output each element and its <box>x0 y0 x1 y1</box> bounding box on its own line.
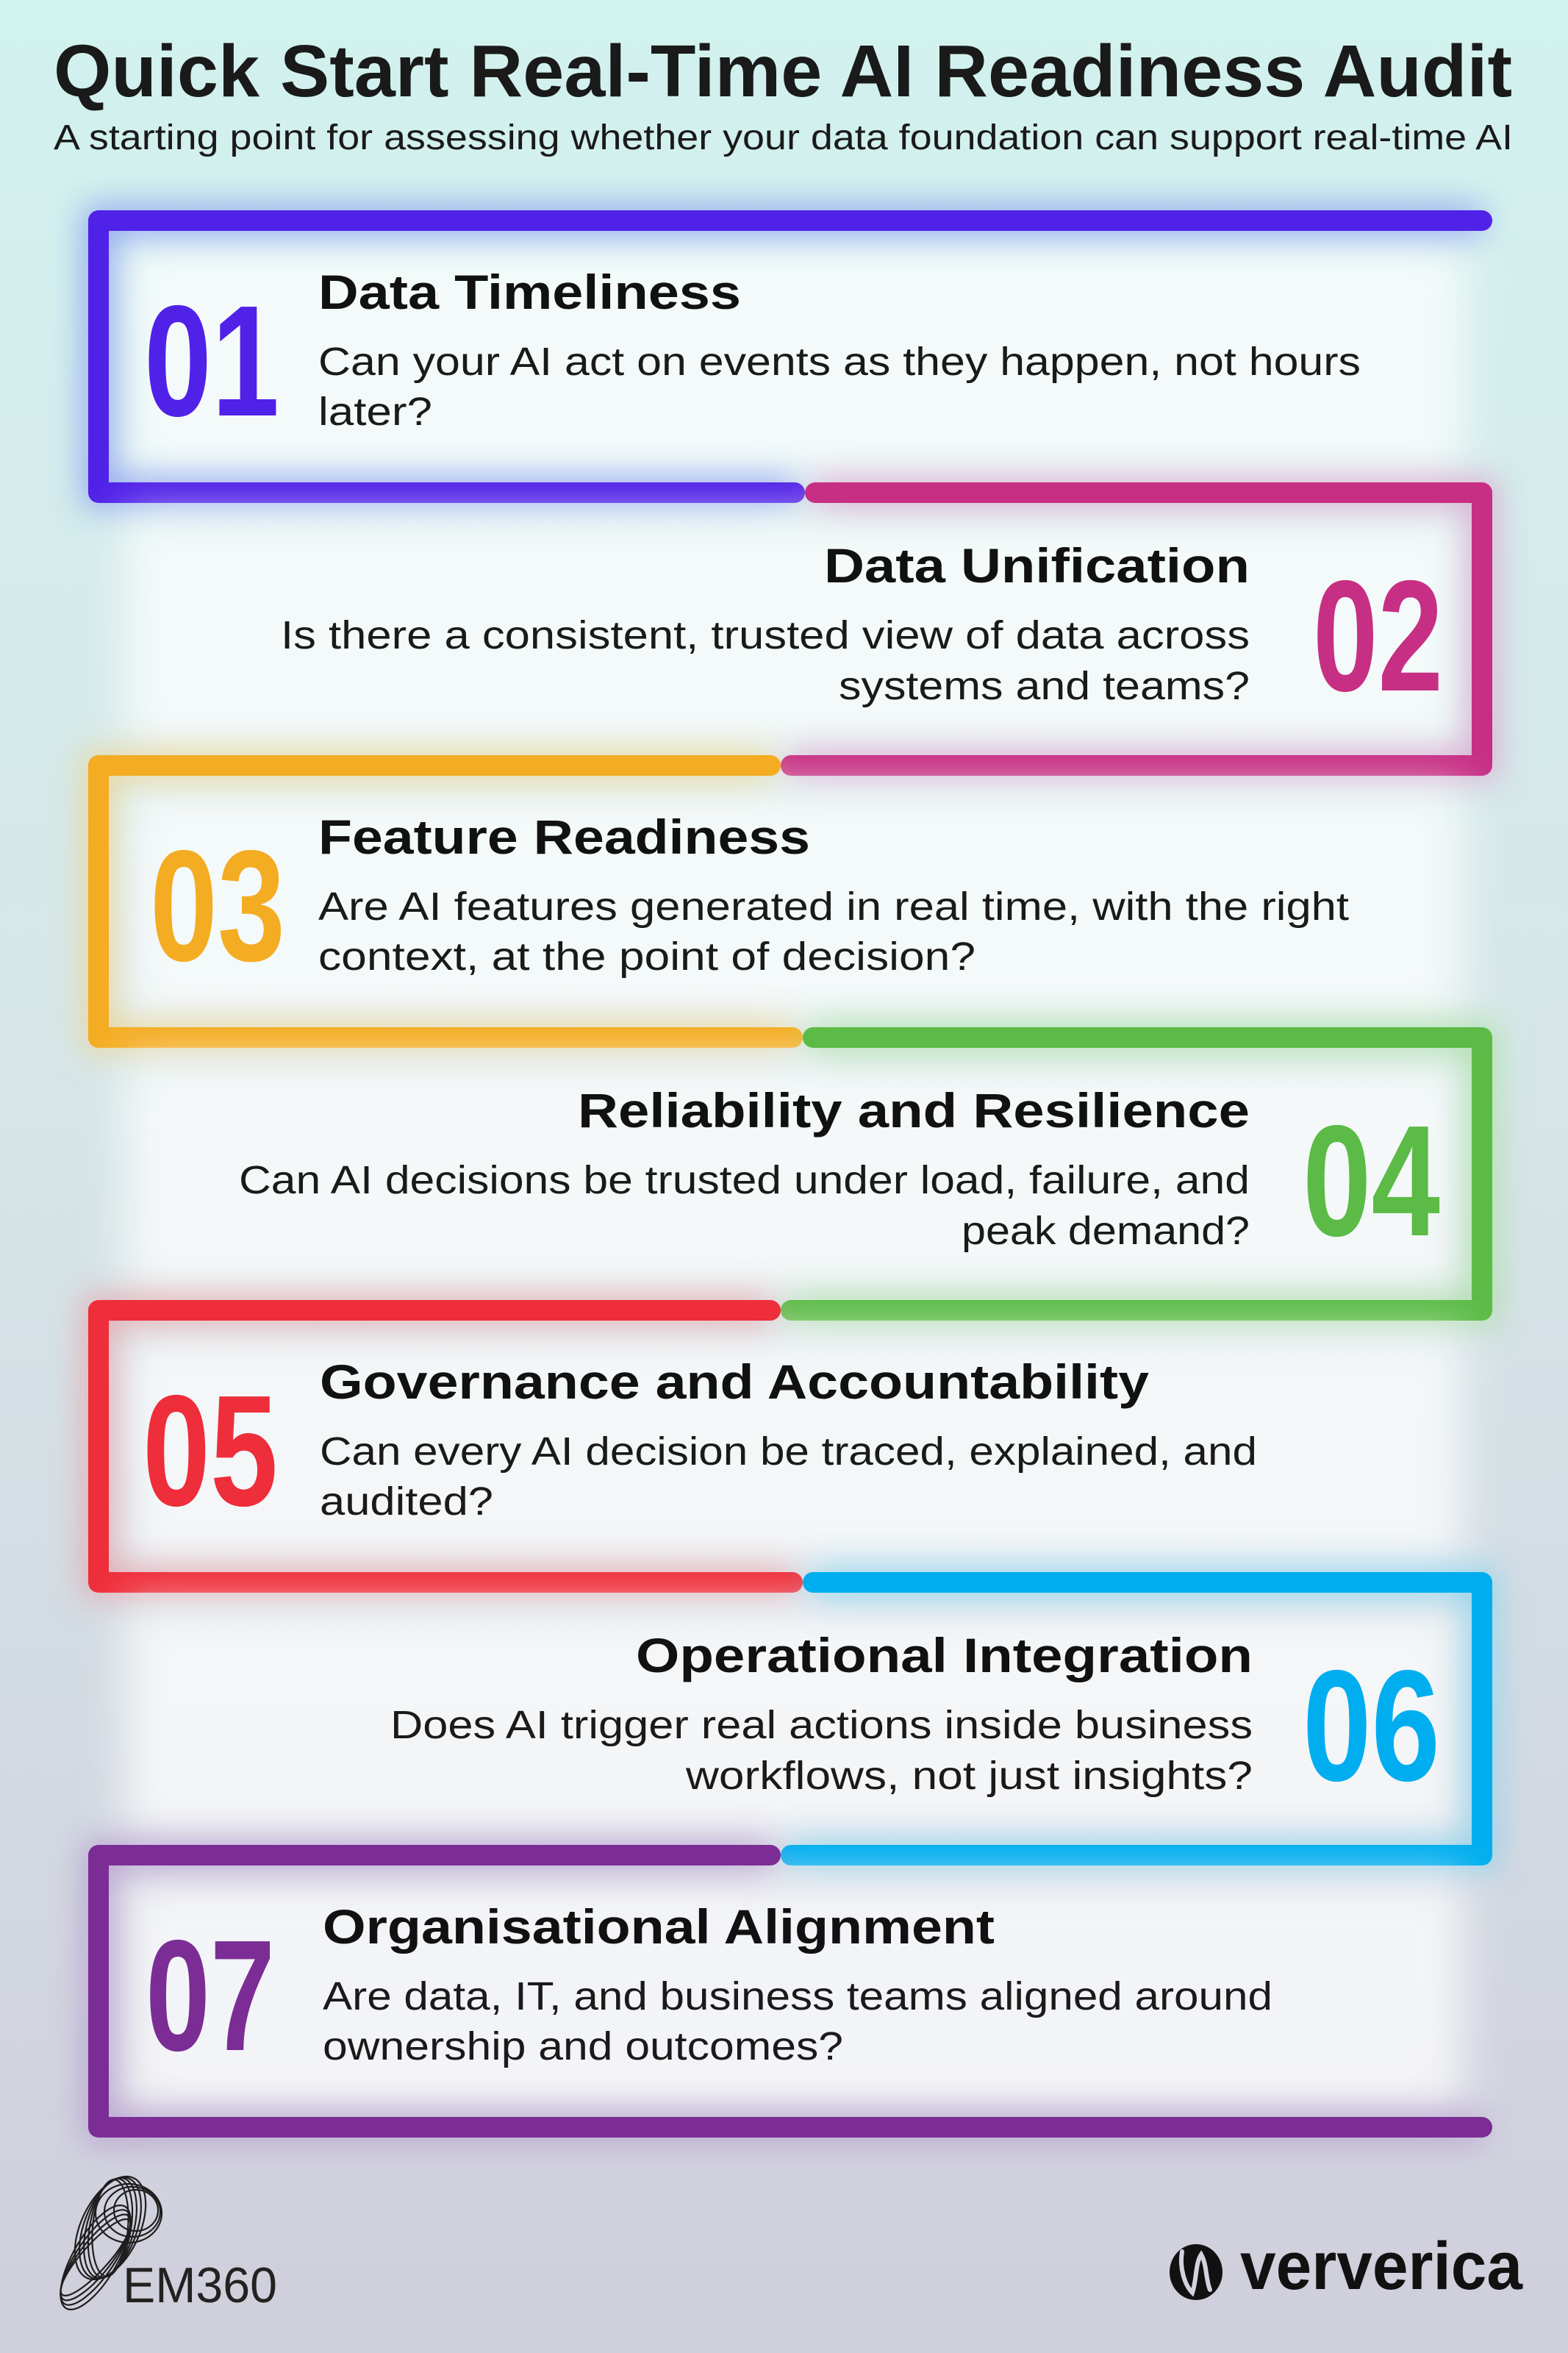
body text: Are AI features generated in real time, with the right <box>318 885 1349 929</box>
logo: EM360: EM360 <box>123 2257 277 2313</box>
panel: 07 Organisational Alignment <box>99 1855 1482 2127</box>
logo: ververica: ververica <box>1240 2229 1523 2304</box>
body text: Can your AI act on events as they happen, not hours <box>318 340 1361 384</box>
panel: 04 Reliability and Resilience <box>125 1038 1482 1310</box>
body text: Does AI trigger real actions inside business <box>390 1703 1253 1747</box>
body text: later? <box>318 390 432 434</box>
heading: Feature Readiness <box>318 810 810 864</box>
heading: Data Unification <box>824 538 1250 593</box>
number 07: 07 <box>146 1907 275 2084</box>
panel: 03 Feature Readiness <box>99 765 1463 1038</box>
panel: 05 Governance and Accountability <box>99 1310 1463 1582</box>
number 05: 05 <box>143 1362 278 1539</box>
heading: Organisational Alignment <box>323 1899 995 1954</box>
body text: Are data, IT, and business teams aligned around <box>323 1974 1272 2018</box>
number 06: 06 <box>1303 1637 1440 1814</box>
logo: EM360 <box>47 2165 277 2319</box>
body text: ownership and outcomes? <box>323 2024 843 2068</box>
body text: peak demand? <box>962 1209 1250 1253</box>
heading: Reliability and Resilience <box>578 1083 1250 1138</box>
body text: Can AI decisions be trusted under load, failure, and <box>239 1158 1250 1202</box>
panel: 06 Operational Integration <box>125 1582 1482 1855</box>
number 02: 02 <box>1313 547 1443 724</box>
subtitle: A starting point for assessing whether your data foundation can support real-time AI <box>54 118 1513 157</box>
number 03: 03 <box>150 817 285 994</box>
number 01: 01 <box>144 272 279 449</box>
number 04: 04 <box>1303 1092 1440 1269</box>
panel: 01 Data Timeliness <box>99 221 1482 493</box>
body text: Is there a consistent, trusted view of data across <box>281 613 1250 657</box>
title: Quick Start Real-Time AI Readiness Audit <box>54 30 1512 113</box>
body text: audited? <box>320 1479 493 1524</box>
heading: Operational Integration <box>636 1628 1253 1682</box>
body text: systems and teams? <box>839 664 1250 708</box>
body text: context, at the point of decision? <box>318 935 975 979</box>
panel: 02 Data Unification <box>125 493 1482 765</box>
heading: Data Timeliness <box>318 265 741 319</box>
body text: workflows, not just insights? <box>685 1754 1253 1798</box>
heading: Governance and Accountability <box>320 1354 1149 1409</box>
body text: Can every AI decision be traced, explained, and <box>320 1429 1257 1474</box>
